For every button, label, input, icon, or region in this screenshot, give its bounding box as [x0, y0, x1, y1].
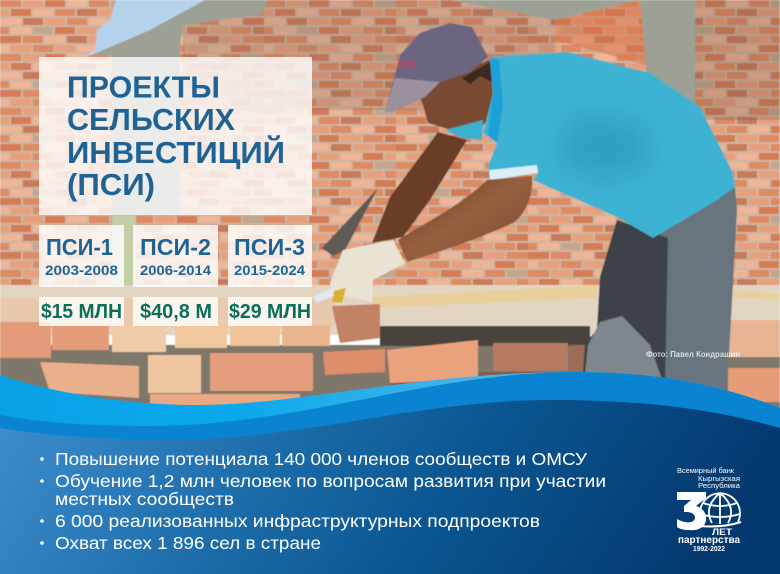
- back arm: [372, 132, 467, 243]
- bullet: training: Обучение 1,2 млн человек по вопросам развития при участии: [55, 471, 606, 491]
- bullet: subprojects: 6 000 реализованных инфраструктурных подпроектов: [55, 511, 540, 531]
- bullet: training: [40, 471, 606, 509]
- panel: ПСИ-1: ПСИ-1: [46, 234, 113, 260]
- upper wall shading: [183, 0, 555, 110]
- panel: ПСИ-3: [228, 225, 312, 287]
- panel: ПСИ-1: 2003-2008: [45, 263, 119, 278]
- ground: [0, 285, 780, 335]
- brick tops left of the hand: [0, 298, 335, 328]
- title: (ПСИ): [67, 167, 155, 202]
- trowel: [322, 188, 378, 256]
- amount: ПСИ-3: $29 МЛН: [229, 301, 311, 323]
- sleeve stripes: [489, 165, 538, 180]
- mortar bed: [0, 345, 780, 410]
- icon: globe: [700, 493, 741, 526]
- panel: title: [39, 57, 312, 215]
- wooden board: [373, 285, 597, 308]
- logo: World Bank 30 years: партнерства: [678, 535, 740, 546]
- amount: ПСИ-2: $40,8 М: [140, 301, 212, 323]
- panel: ПСИ-1: [39, 225, 124, 287]
- cap logo: PM: [396, 57, 416, 73]
- man: [313, 23, 737, 392]
- panel: ПСИ-3: ПСИ-3: [234, 234, 305, 260]
- laid bricks: [0, 304, 780, 408]
- bullet: coverage: Охват всех 1 896 сел в стране: [55, 533, 321, 553]
- photo credit: Фото: Павел Кондрашин: [646, 350, 740, 359]
- front arm: [398, 176, 532, 262]
- wave: mid blue band: [0, 372, 780, 574]
- greenery behind the walls: [110, 215, 180, 290]
- title: СЕЛЬСКИХ: [67, 102, 235, 137]
- panel: ПСИ-2: 2006-2014: [140, 263, 212, 278]
- logo: World Bank 30 years: Всемирный банк: [677, 466, 735, 475]
- logo: World Bank 30 years: Республика: [698, 481, 741, 490]
- bullet list: [40, 449, 606, 553]
- left brick wall: [0, 0, 116, 290]
- amount: ПСИ-1: $15 МЛН: [41, 301, 122, 323]
- collar: [488, 57, 503, 143]
- amount: ПСИ-2: [133, 297, 218, 326]
- panel: ПСИ-2: ПСИ-2: [140, 234, 211, 260]
- dusty knee: [585, 316, 664, 385]
- glove: [330, 240, 405, 302]
- hair and ear: [462, 62, 492, 84]
- title: ИНВЕСТИЦИЙ: [67, 134, 285, 170]
- collar under the chin: [445, 120, 483, 140]
- bullet: capacity: Повышение потенциала 140 000 членов сообществ и ОМСУ: [55, 449, 588, 469]
- mountains: [80, 0, 780, 300]
- shirt: [483, 52, 735, 238]
- logo: World Bank 30 years: Кыргызская: [698, 474, 740, 483]
- central brick wall: [136, 0, 646, 290]
- wave: light blue band: [0, 372, 780, 574]
- trowel handle: [332, 288, 346, 303]
- panel: ПСИ-2: [133, 225, 218, 287]
- title: [67, 70, 285, 202]
- photo: bricklayer at a construction site: [0, 0, 780, 410]
- wave: dark gradient background: [0, 400, 780, 574]
- sky: [0, 0, 780, 60]
- panel: ПСИ-3: 2015-2024: [234, 263, 306, 278]
- head: [415, 60, 494, 134]
- logo: World Bank 30 years: ЛЕТ: [712, 527, 732, 538]
- title: ПРОЕКТЫ: [67, 70, 220, 104]
- bullet: training: местных сообществ: [55, 489, 234, 509]
- shirt shadow: [555, 115, 650, 180]
- logo: World Bank 30 years: [677, 466, 741, 553]
- cap: [385, 23, 488, 112]
- logo: World Bank 30 years: 1992-2022: [693, 546, 725, 553]
- icon: number 3: [677, 492, 706, 530]
- jeans: [583, 187, 737, 392]
- right wall shadow: [695, 0, 780, 120]
- right brick wall: [695, 0, 780, 292]
- tower shading: [555, 0, 646, 65]
- sleeve at wrist: [313, 288, 334, 303]
